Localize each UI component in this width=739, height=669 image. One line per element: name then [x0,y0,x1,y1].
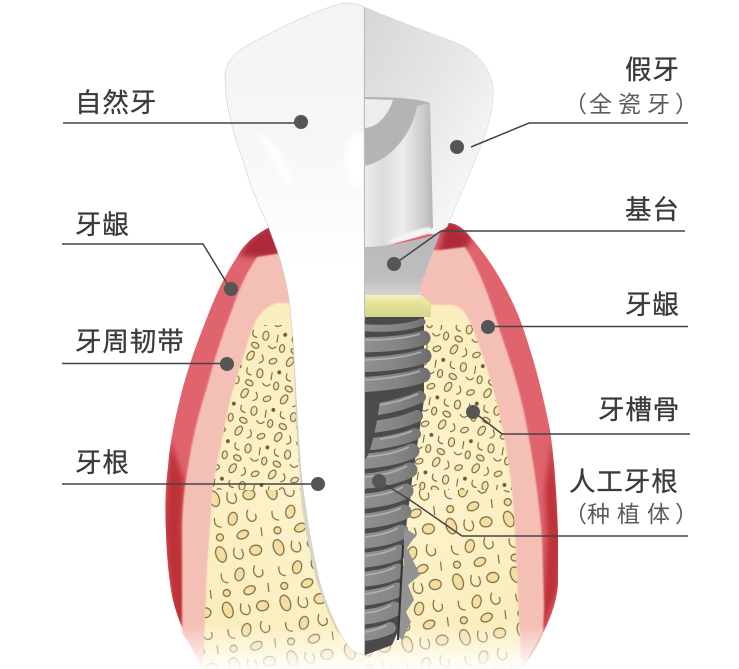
implant lower edge teeth [397,528,420,640]
callout: periodontal ligament [62,327,234,371]
gum top, left [238,228,278,260]
panel: natural tooth half [225,3,370,655]
crown highlight, centre [346,132,370,188]
panel: implant screw [355,317,424,655]
label text: 牙槽骨 [598,395,680,425]
abutment recess highlight [365,99,393,128]
implant core [365,317,424,655]
implant dark edge [398,545,403,640]
gum dark margin, right [542,444,558,632]
callout: abutment [387,195,685,271]
panel: alveolar bone [200,303,530,669]
implant flute [365,402,380,460]
label subtext: （全瓷牙） [564,91,698,117]
gum top, right [438,221,472,254]
porcelain crown [364,7,493,234]
label text: 自然牙 [75,88,157,118]
label text: 假牙 [625,55,680,85]
callout: natural crown [63,88,308,129]
callout: prosthetic crown [450,55,698,154]
label text: 牙龈 [75,210,130,240]
abutment shoulder [365,233,440,295]
label text: 牙根 [75,448,130,478]
label subtext: （种植体） [564,501,698,527]
abutment gloss [386,227,433,243]
callout: alveolar bone [466,395,690,434]
natural tooth shape [225,3,365,655]
gum dark margin, left [165,442,186,628]
gum shading [164,221,562,650]
gum outer red layer [165,223,558,669]
implant threads [355,322,424,636]
panel: gum tissue [164,221,562,669]
label text: 牙龈 [625,290,680,320]
centre divider [364,8,366,655]
crown highlight, left [258,132,290,190]
label text: 人工牙根 [569,467,679,497]
yellow collar [365,295,431,317]
bottom fade [160,625,570,669]
gum inner pink layer [182,247,544,669]
bone fill [203,303,522,669]
label text: 基台 [625,195,680,225]
panel: prosthetic crown half [364,7,493,317]
implant thread highlights [365,334,421,632]
label text: 牙周韧带 [75,327,185,357]
bone pores [200,325,530,669]
bone shadow along root [293,340,340,633]
callout: gum right [481,290,688,334]
callout: implant [372,467,698,536]
abutment upper post [365,97,433,252]
callout: gum left [62,210,238,296]
callout: tooth root [62,448,325,491]
abutment screw recess [365,97,430,166]
